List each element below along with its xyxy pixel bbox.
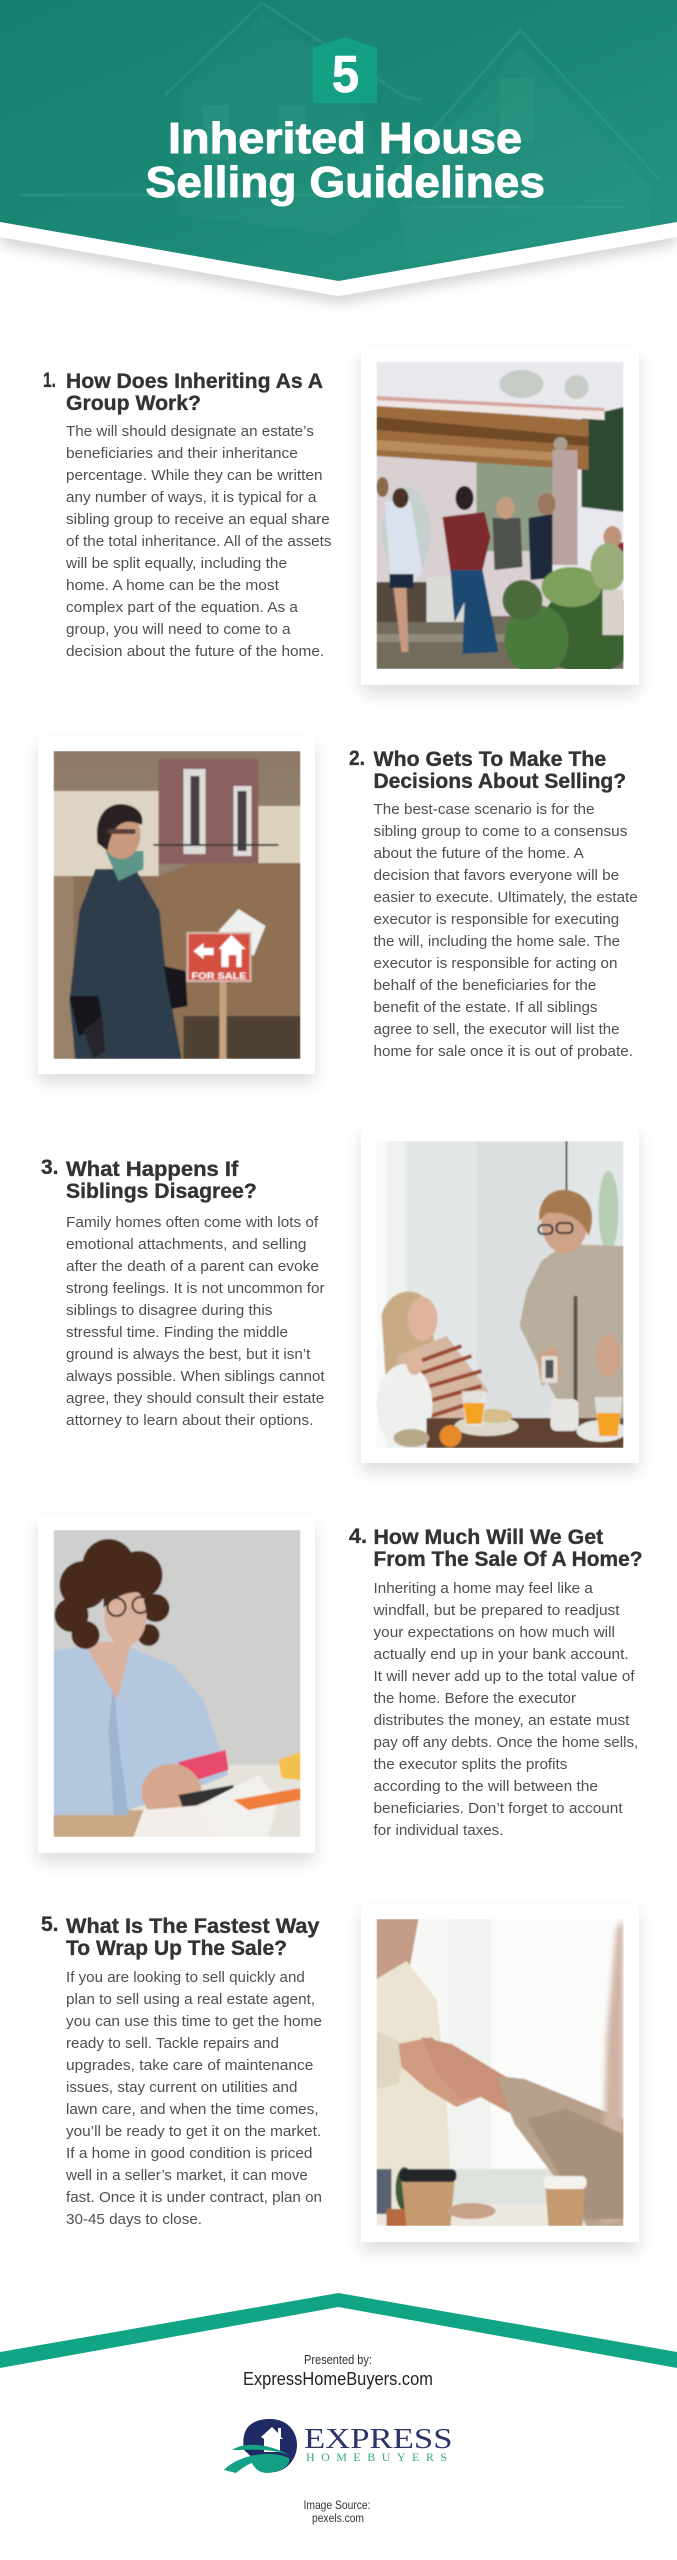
body text 3: emotional attachments, and selling — [66, 1237, 306, 1253]
photo card 2: woman with for sale sign: FOR SALE — [192, 971, 246, 982]
body text 3: always possible. When siblings cannot — [66, 1369, 325, 1385]
body text 1: sibling group to receive an equal share — [66, 512, 330, 528]
heading 4: How Much Will We Get — [374, 1525, 603, 1549]
body text 4: pay off any debts. Once the home sells, — [374, 1735, 638, 1751]
body text 3: agree, they should consult their estate — [66, 1391, 324, 1407]
badge: number 5: 5 — [332, 46, 359, 104]
photo card 5: handshake — [361, 1904, 639, 2242]
heading 5: What Is The Fastest Way — [66, 1914, 320, 1938]
body text 3: stressful time. Finding the middle — [66, 1325, 288, 1341]
heading 5: 5. — [41, 1912, 58, 1936]
heading 1: 1. — [43, 368, 56, 392]
heading 2: Decisions About Selling? — [374, 769, 626, 793]
body text 4: the home. Before the executor — [374, 1691, 576, 1707]
body text 1: group, you will need to come to a — [66, 622, 291, 638]
body text 4: It will never add up to the total value of — [374, 1669, 636, 1685]
body text 2: behalf of the beneficiaries for the — [374, 978, 596, 994]
body text 5: ready to sell. Tackle repairs and — [66, 2036, 279, 2052]
body text 2: executor is responsible for executing — [374, 912, 619, 928]
body text 3: Family homes often come with lots of — [66, 1215, 319, 1231]
icon: house and swoosh — [224, 2419, 297, 2473]
body text 2 — [374, 802, 638, 1060]
body text 5: issues, stay current on utilities and — [66, 2080, 297, 2096]
logo: Express Homebuyers: HOMEBUYERS — [306, 2450, 447, 2464]
image source credit — [304, 2498, 370, 2525]
body text 2: about the future of the home. A — [374, 846, 584, 862]
body text 5: lawn care, and when the time comes, — [66, 2102, 319, 2118]
heading 2: 2. — [349, 746, 365, 770]
body text 3: strong feelings. It is not uncommon for — [66, 1281, 325, 1297]
body text 5: 30-45 days to close. — [66, 2212, 202, 2228]
header banner — [0, 0, 677, 296]
section 1: group inheritance — [43, 347, 639, 685]
body text 5: plan to sell using a real estate agent, — [66, 1992, 315, 2008]
body text 4: actually end up in your bank account. — [374, 1647, 629, 1663]
photo card 4: woman with phone and papers — [38, 1515, 315, 1853]
heading 3: 3. — [41, 1155, 58, 1179]
body text 4: for individual taxes. — [374, 1823, 504, 1839]
body text 1: will be split equally, including the — [65, 556, 287, 572]
body text 5: you’ll be ready to get it on the market. — [66, 2124, 321, 2140]
teal header background — [0, 0, 677, 281]
heading 3: What Happens If — [66, 1157, 239, 1181]
body text 5: fast. Once it is under contract, plan on — [66, 2190, 322, 2206]
title: Inherited House — [168, 114, 522, 163]
body text 4: according to the will between the — [374, 1779, 598, 1795]
photo card 1: group on porch — [361, 347, 639, 685]
heading 3: Siblings Disagree? — [66, 1179, 257, 1203]
heading 4: From The Sale Of A Home? — [374, 1547, 642, 1571]
heading 1: Group Work? — [66, 391, 201, 415]
body text 2: sibling group to come to a consensus — [374, 824, 627, 840]
body text 1: percentage. While they can be written — [66, 468, 322, 484]
heading 2 — [349, 746, 626, 793]
image source credit: pexels.com — [312, 2511, 364, 2525]
wordmark: EXPRESS — [304, 2424, 452, 2455]
body text 2: agree to sell, the executor will list the — [374, 1022, 620, 1038]
heading 5 — [41, 1912, 320, 1960]
body text 5: you can use this time to get the home — [66, 2014, 322, 2030]
body text 4: the executor splits the profits — [374, 1757, 567, 1773]
body text 4: Inheriting a home may feel like a — [374, 1581, 594, 1597]
body text 5: If you are looking to sell quickly and — [66, 1970, 305, 1986]
house silhouette background — [20, 3, 660, 207]
heading 3 — [41, 1155, 257, 1203]
title: Selling Guidelines — [146, 158, 545, 207]
body text 1: complex part of the equation. As a — [66, 600, 299, 616]
presented by credit: ExpressHomeBuyers.com — [243, 2369, 433, 2389]
white chevron band with shadow — [0, 222, 677, 296]
body text 1: home. A home can be the most — [66, 578, 279, 594]
body text 4: your expectations on how much will — [374, 1625, 615, 1641]
section 3: disagreement — [41, 1126, 639, 1463]
presented by credit: Presented by: — [304, 2353, 372, 2367]
body text 4: windfall, but be prepared to readjust — [372, 1603, 620, 1619]
body text 3: after the death of a parent can evoke — [66, 1259, 319, 1275]
footer chevron — [0, 2293, 677, 2368]
body text 1 — [65, 424, 331, 660]
body text 3: attorney to learn about their options. — [66, 1413, 313, 1429]
body text 4: beneficiaries. Don’t forget to account — [374, 1801, 623, 1817]
body text 2: decision that favors everyone will be — [374, 868, 619, 884]
logo: Express Homebuyers — [224, 2419, 452, 2473]
body text 5: If a home in good condition is priced — [66, 2146, 312, 2162]
presented by credit — [243, 2353, 433, 2389]
image source credit: Image Source: — [304, 2498, 370, 2512]
body text 2: the will, including the home sale. The — [374, 934, 620, 950]
body text 2: home for sale once it is out of probate. — [374, 1044, 633, 1060]
body text 3: ground is always the best, but it isn’t — [66, 1347, 310, 1363]
section 4: proceeds — [38, 1515, 642, 1853]
body text 2: easier to execute. Ultimately, the estate — [374, 890, 638, 906]
body text 3 — [66, 1215, 325, 1429]
photo card 2: woman with for sale sign — [38, 736, 315, 1074]
heading 2: Who Gets To Make The — [374, 747, 606, 771]
body text 5: well in a seller’s market, it can move — [65, 2168, 308, 2184]
badge: number 5 — [313, 37, 377, 104]
photo card 3: mother and daughter at table — [361, 1126, 639, 1463]
body text 1: beneficiaries and their inheritance — [66, 446, 298, 462]
heading 5: To Wrap Up The Sale? — [66, 1936, 287, 1960]
body text 1: The will should designate an estate’s — [66, 424, 314, 440]
heading 1: How Does Inheriting As A — [66, 369, 323, 393]
body text 2: benefit of the estate. If all siblings — [374, 1000, 598, 1016]
body text 1: of the total inheritance. All of the assets — [66, 534, 332, 550]
body text 5 — [65, 1970, 322, 2228]
heading 1 — [43, 368, 323, 415]
title — [146, 114, 545, 207]
body text 3: siblings to disagree during this — [66, 1303, 272, 1319]
heading 4 — [349, 1524, 642, 1571]
section 2: decisions — [38, 736, 638, 1074]
heading 4: 4. — [349, 1524, 367, 1548]
body text 4: distributes the money, an estate must — [374, 1713, 630, 1729]
section 5: fastest sale — [41, 1904, 639, 2242]
body text 5: upgrades, take care of maintenance — [66, 2058, 313, 2074]
body text 1: decision about the future of the home. — [66, 644, 324, 660]
body text 4 — [372, 1581, 638, 1839]
body text 1: any number of ways, it is typical for a — [66, 490, 317, 506]
body text 2: executor is responsible for acting on — [374, 956, 618, 972]
body text 2: The best-case scenario is for the — [374, 802, 594, 818]
